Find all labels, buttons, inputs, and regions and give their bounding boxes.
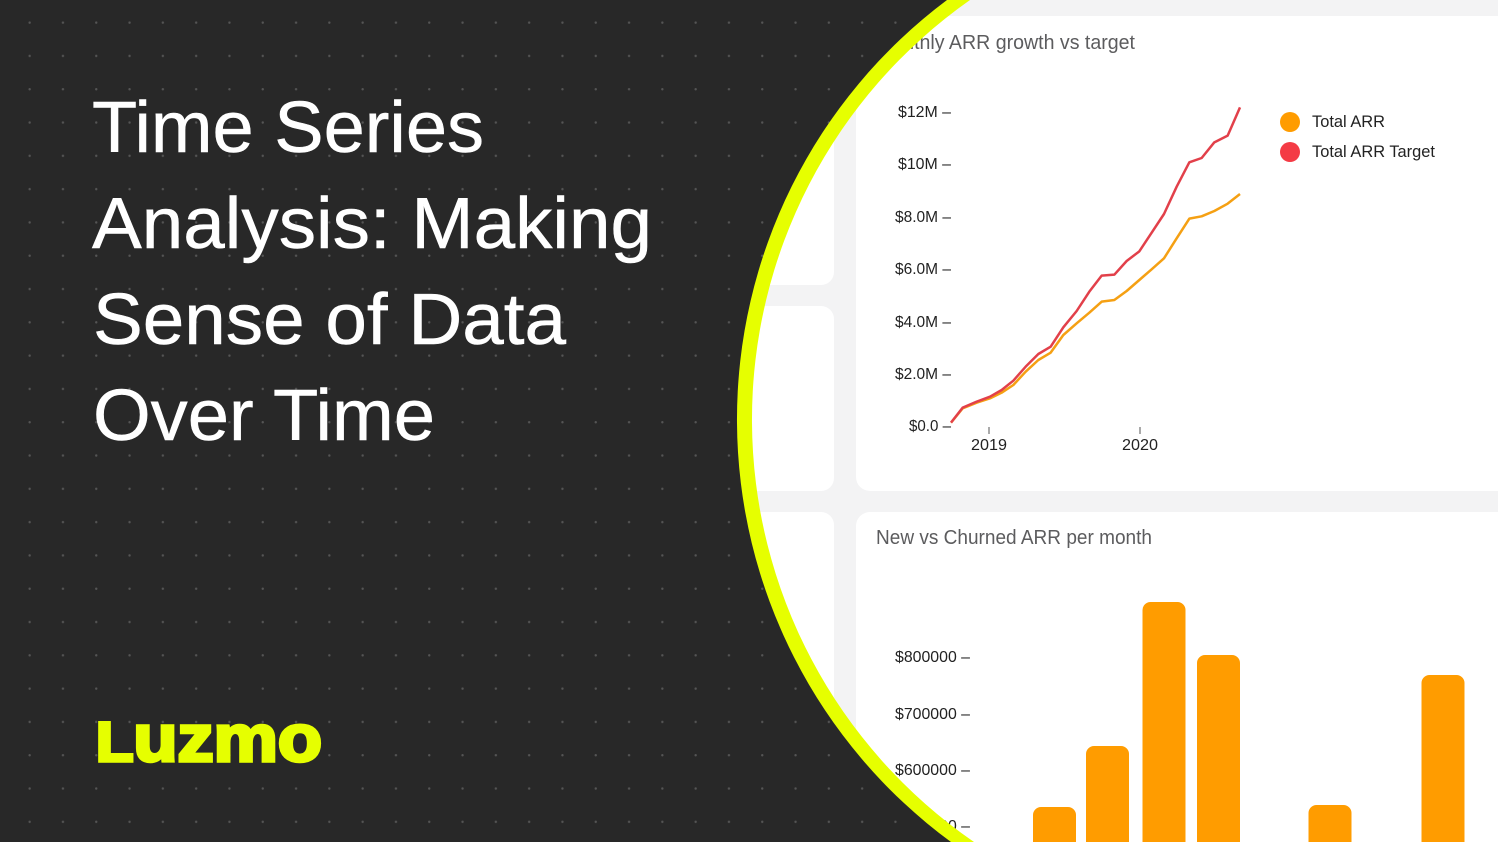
y axis labels: $8.0M – <box>895 209 951 226</box>
title: Analysis: Making <box>92 184 652 264</box>
y axis labels <box>895 104 951 435</box>
title <box>92 88 652 456</box>
y axis labels: $12M – <box>898 104 951 121</box>
y axis labels: $600000 – <box>895 762 970 779</box>
card background <box>856 512 1498 842</box>
title: Over Time <box>93 376 435 456</box>
legend: Total ARR Target <box>1312 142 1435 161</box>
x axis labels and ticks: 2020 <box>1122 437 1158 454</box>
title: Time Series <box>92 88 484 168</box>
y axis labels: $2.0M – <box>895 366 951 383</box>
y axis labels <box>895 649 970 835</box>
legend: Total ARR <box>1312 112 1385 131</box>
chart title: Monthly ARR growth vs target <box>876 32 1135 54</box>
yellow circular ring <box>737 0 974 842</box>
panel: left column middle card <box>640 306 834 491</box>
y axis labels: $800000 – <box>895 649 970 666</box>
bars <box>1033 602 1464 842</box>
y axis labels: $700000 – <box>895 706 970 723</box>
line: total ARR <box>951 194 1240 423</box>
y axis labels: $500000 – <box>895 818 970 835</box>
y axis labels: $6.0M – <box>895 261 951 278</box>
logo: luzmo: Luzmo <box>96 701 322 775</box>
panel: left column bottom card <box>640 512 834 842</box>
title: Sense of Data <box>93 280 567 360</box>
card background <box>856 16 1498 491</box>
y axis labels: $0.0 – <box>909 418 951 435</box>
panel: monthly ARR growth vs target <box>856 16 1498 491</box>
line: total ARR target <box>951 107 1240 423</box>
x axis labels and ticks <box>971 427 1158 454</box>
x axis labels and ticks: 2019 <box>971 437 1007 454</box>
y axis labels: $4.0M – <box>895 314 951 331</box>
legend <box>1280 112 1435 162</box>
y axis labels: $10M – <box>898 156 951 173</box>
dashboard screenshot background <box>700 0 1498 842</box>
chart title: New vs Churned ARR per month <box>876 527 1152 549</box>
panel: new vs churned ARR per month <box>856 512 1498 842</box>
panel: left column top card <box>640 16 834 285</box>
dark dotted background with curved right edge <box>0 0 952 842</box>
